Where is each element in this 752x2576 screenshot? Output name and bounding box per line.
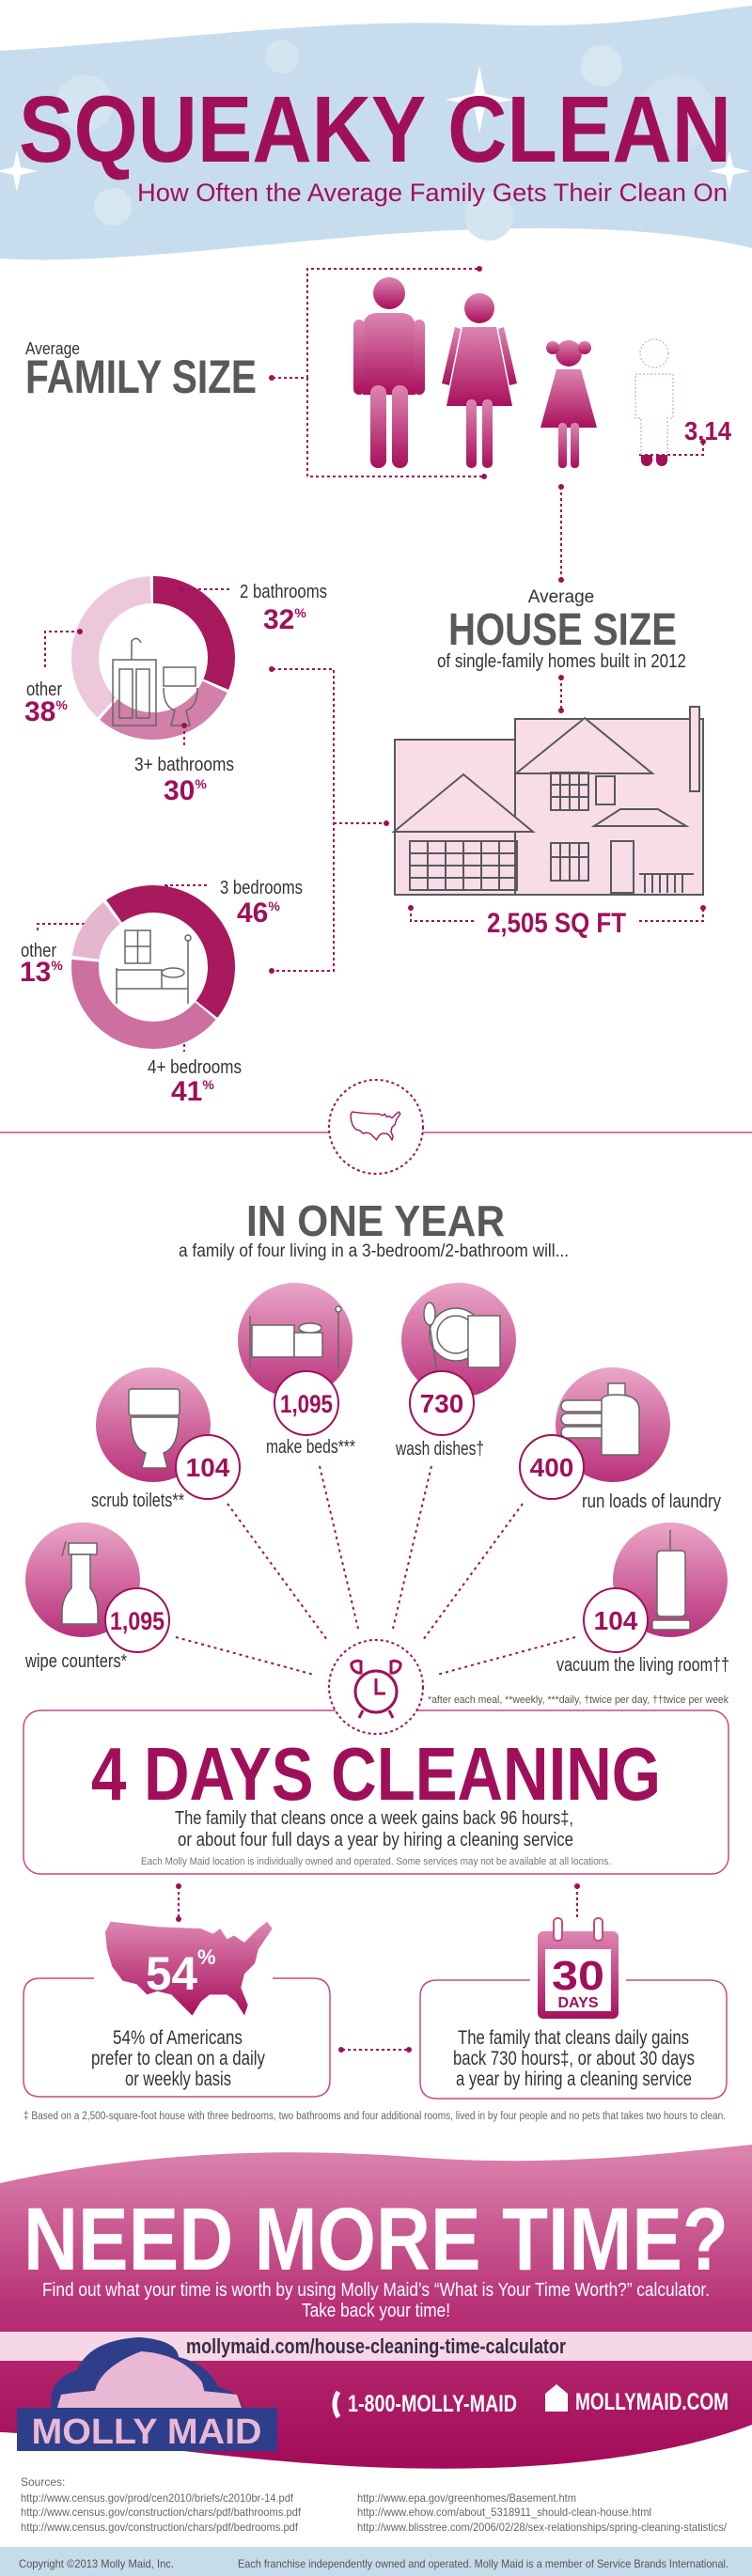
chore: wipe counters	[24, 1522, 169, 1672]
bathroom labels: %	[55, 697, 68, 712]
4 days box	[24, 1640, 728, 1874]
4 days box: or about four full days a year by hiring a cleaning service	[178, 1830, 573, 1850]
chore: make beds: 1,095	[280, 1390, 333, 1418]
man	[353, 277, 425, 468]
panel: 54% of Americans: or weekly basis	[125, 2069, 231, 2090]
panel: 54% of Americans: %	[197, 1945, 216, 1969]
clock icon	[329, 1640, 423, 1734]
bathroom donut	[57, 562, 249, 754]
bathroom labels: 2 bathrooms	[240, 582, 327, 602]
bedroom labels: %	[268, 898, 280, 913]
chore: laundry: 400	[530, 1453, 573, 1482]
house size heading: of single-family homes built in 2012	[437, 651, 686, 672]
chore: make beds: make beds***	[266, 1437, 355, 1458]
bathroom labels	[24, 582, 327, 806]
4 days box: 4 DAYS CLEANING	[91, 1732, 661, 1816]
bathroom labels: 30	[164, 775, 195, 806]
chore: vacuum	[556, 1522, 729, 1676]
girl	[540, 340, 597, 468]
house illustration	[394, 707, 703, 895]
woman	[442, 293, 517, 468]
panel: 30 days: DAYS	[558, 1995, 599, 2011]
sources: http://www.epa.gov/greenhomes/Basement.htm	[357, 2491, 576, 2505]
house size value: 2,505 SQ FT	[487, 908, 626, 939]
3.14 label: 3.14	[684, 416, 731, 445]
sources: http://www.blisstree.com/2006/02/28/sex-relationships/spring-cleaning-statistics/	[357, 2521, 728, 2534]
chore: scrub toilets: 104	[186, 1453, 230, 1482]
chore: laundry: run loads of laundry	[582, 1491, 721, 1512]
call to action band: mollymaid.com/house-cleaning-time-calculator	[186, 2334, 566, 2358]
divider with map circle	[0, 1080, 752, 1174]
in one year heading	[179, 1196, 569, 1261]
bathroom labels: 3+ bathrooms	[134, 755, 234, 775]
chore: wash dishes	[395, 1283, 516, 1460]
chore: wipe counters: 1,095	[110, 1607, 164, 1635]
in one year heading: a family of four living in a 3-bedroom/2-bathroom will...	[179, 1241, 569, 1261]
chore: vacuum: 104	[594, 1606, 638, 1635]
chore: wash dishes: wash dishes†	[395, 1439, 484, 1460]
sources	[21, 2475, 728, 2534]
house size heading: HOUSE SIZE	[448, 605, 677, 655]
bedroom labels: 4+ bedrooms	[148, 1057, 242, 1078]
chore: laundry	[520, 1367, 721, 1512]
family size heading: Average	[25, 339, 80, 358]
family figures	[353, 277, 597, 468]
bedroom labels: other	[21, 941, 56, 961]
in one year heading: IN ONE YEAR	[246, 1196, 505, 1245]
bathroom labels: 32	[263, 604, 294, 635]
chore: wipe counters: wipe counters*	[24, 1651, 127, 1672]
bedroom labels: %	[202, 1077, 214, 1092]
sources: http://www.ehow.com/about_5318911_should-clean-house.html	[357, 2506, 651, 2519]
sources: http://www.census.gov/prod/cen2010/briefs/c2010br-14.pdf	[21, 2491, 294, 2505]
family size heading: FAMILY SIZE	[25, 351, 257, 403]
logo: molly maid: MOLLY MAID	[32, 2412, 261, 2452]
call to action band	[0, 2145, 752, 2469]
bedroom labels: 46	[237, 898, 268, 929]
header band	[0, 6, 752, 259]
bedroom donut	[57, 871, 249, 1063]
4 days box: Each Molly Maid location is individually owned and operated. Some services may not be available at all locations.	[141, 1856, 611, 1867]
contact: website	[545, 2384, 728, 2415]
bathroom labels: 38	[24, 696, 55, 727]
icon: window and bed	[117, 930, 191, 1004]
panel: 30 days: back 730 hours‡, or about 30 days	[453, 2048, 695, 2069]
call to action band: Take back your time!	[302, 2301, 450, 2321]
sources: Sources:	[21, 2475, 65, 2489]
panel: 54% of Americans: 54% of Americans	[113, 2027, 243, 2049]
sources: http://www.census.gov/construction/chars/pdf/bathrooms.pdf	[21, 2506, 302, 2519]
ghost child	[635, 339, 673, 461]
chore: make beds	[238, 1283, 355, 1458]
bedroom labels	[20, 878, 303, 1107]
bathroom labels: %	[195, 776, 207, 791]
panel: 30 days: The family that cleans daily gains	[458, 2027, 689, 2049]
house size heading: Average	[528, 587, 594, 607]
house size heading	[437, 587, 686, 672]
bedroom labels: %	[51, 958, 63, 973]
icon: vanity and toilet	[113, 638, 197, 726]
bedroom labels: 41	[171, 1076, 202, 1107]
bedroom labels: 3 bedrooms	[220, 878, 303, 898]
chore: wash dishes: 730	[420, 1389, 463, 1418]
panel: 54% of Americans	[24, 1922, 330, 2097]
panel: 30 days: 30	[552, 1953, 604, 1999]
sources: http://www.census.gov/construction/chars/pdf/bedrooms.pdf	[21, 2521, 299, 2534]
subtitle: How Often the Average Family Gets Their Clean On	[137, 179, 728, 207]
footer	[0, 2547, 752, 2576]
bathroom labels: other	[26, 679, 62, 700]
family size heading	[25, 339, 257, 403]
panel: 54% of Americans: 54	[146, 1947, 197, 2000]
footer: Copyright ©2013 Molly Maid, Inc.	[19, 2557, 174, 2570]
panel: 54% of Americans: prefer to clean on a daily	[91, 2048, 265, 2069]
chore: scrub toilets: scrub toilets**	[91, 1491, 184, 1511]
bedroom labels: 13	[20, 957, 51, 988]
panel: 30 days	[420, 1918, 727, 2099]
logo: molly maid	[17, 2337, 277, 2452]
panel: 30 days: a year by hiring a cleaning service	[456, 2069, 692, 2090]
contact: phone: 1-800-MOLLY-MAID	[348, 2391, 517, 2417]
4 days box: The family that cleans once a week gains back 96 hours‡,	[175, 1808, 573, 1829]
4 days box: *after each meal, **weekly, ***daily, †twice per day, ††twice per week	[428, 1694, 728, 1706]
chore: scrub toilets	[91, 1367, 240, 1511]
bathroom labels: %	[294, 605, 306, 620]
radiating connectors	[176, 1466, 575, 1675]
